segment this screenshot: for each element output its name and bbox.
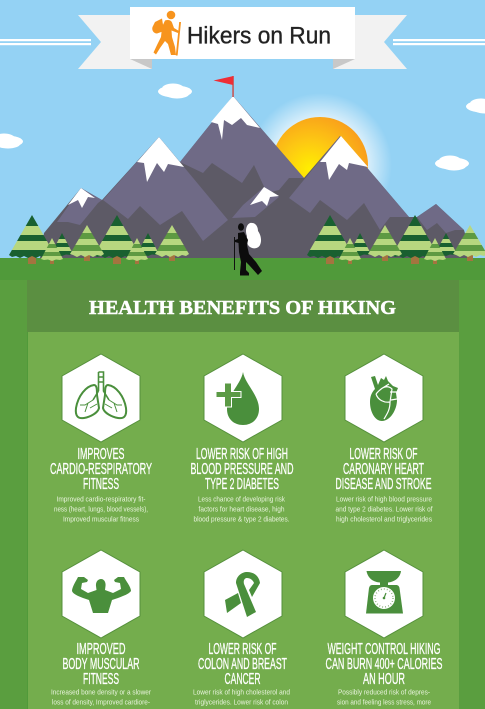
sun [248, 93, 392, 237]
benefit: colon and breast cancer [193, 550, 290, 706]
title [62, 641, 140, 688]
dark mountain base [40, 96, 472, 258]
snow caps [68, 96, 368, 208]
hexagon badge [204, 550, 282, 638]
icon: heart [370, 376, 398, 421]
title: IMPROVED [76, 641, 126, 658]
panel background outer edge [0, 280, 27, 709]
description: Lower risk of high blood pressure [336, 494, 432, 504]
description [54, 494, 148, 524]
description: and type 2 diabetes. Lower risk of [336, 504, 432, 514]
title: LOWER RISK OF [208, 641, 276, 658]
icon: flexing torso [72, 577, 131, 613]
title [326, 641, 442, 688]
title: BLOOD PRESSURE AND [190, 461, 294, 478]
ribbon tail right [333, 15, 407, 69]
description: Improved muscular fitness [63, 514, 139, 524]
trees left [8, 215, 190, 264]
logo text: Hikers on Run [187, 22, 331, 50]
backpack [246, 223, 261, 248]
clouds [0, 84, 485, 170]
description: triglycerides. Lower risk of colon [195, 698, 288, 706]
description: ness (heart, lungs, blood vessels), [54, 504, 148, 514]
title: AN HOUR [363, 671, 405, 688]
benefit: cardio-respiratory fitness [50, 354, 152, 524]
panel body [28, 332, 459, 709]
description: Improved cardio-respiratory fit- [56, 494, 146, 504]
description: Less chance of developing risk [198, 494, 285, 504]
mountain: small center [232, 187, 279, 218]
walking pole [234, 237, 235, 270]
title: FITNESS [83, 476, 119, 493]
description: Possibly reduced risk of depres- [338, 688, 431, 696]
mountain: far left [57, 188, 102, 225]
benefit: blood pressure and diabetes [190, 354, 294, 524]
banner plate [130, 7, 355, 59]
sky [0, 0, 485, 260]
ground [0, 258, 485, 709]
description: Increased bone density or a slower [51, 688, 152, 696]
flag [214, 76, 234, 97]
title: CARONARY HEART [343, 461, 424, 478]
title: LOWER RISK OF HIGH [196, 446, 288, 463]
benefit: coronary heart disease [336, 354, 432, 524]
panel header band [27, 280, 459, 332]
hexagon badge [62, 354, 140, 442]
title [50, 446, 152, 493]
mountain: far right [417, 204, 464, 233]
description: Lower risk of high cholesterol and [193, 688, 290, 696]
description [194, 494, 290, 524]
title: CANCER [224, 671, 260, 688]
mountain: right [289, 136, 409, 230]
hexagon badge [204, 354, 282, 442]
title: CARDIO-RESPIRATORY [50, 461, 152, 478]
description [51, 688, 152, 706]
mountain: center [180, 96, 304, 193]
benefit: weight control [326, 550, 442, 706]
description: sion and feeling less stress, more [337, 698, 431, 706]
icon: lungs [76, 372, 126, 418]
benefit: body muscular fitness [51, 550, 152, 706]
icon: awareness ribbon [225, 572, 260, 617]
icon: drop and plus [216, 372, 259, 425]
title: COLON AND BREAST [198, 656, 287, 673]
title [190, 446, 294, 493]
description: factors for heart disease, high [198, 504, 285, 514]
hexagon badge [345, 354, 423, 442]
icon: orange hiker logo [152, 11, 181, 55]
description: blood pressure & type 2 diabetes. [194, 514, 290, 524]
title [336, 446, 432, 493]
ribbon fold right [333, 59, 355, 69]
title banner [78, 7, 407, 69]
title: IMPROVES [78, 446, 124, 463]
description: high cholesterol and triglycerides [336, 514, 432, 524]
mountain: mid left [103, 137, 228, 241]
heading: HEALTH BENEFITS OF HIKING [89, 298, 396, 319]
description [336, 494, 432, 524]
title: FITNESS [83, 671, 119, 688]
decorative double lines [0, 39, 485, 45]
ribbon tail left [78, 15, 152, 69]
title: BODY MUSCULAR [62, 656, 140, 673]
description [337, 688, 431, 706]
ribbon fold left [130, 59, 152, 69]
description [193, 688, 290, 706]
hiker silhouette [234, 223, 262, 276]
title [198, 641, 287, 688]
mountains [40, 96, 472, 258]
trees right [306, 215, 485, 264]
title: TYPE 2 DIABETES [205, 476, 279, 493]
description: loss of density, Improved cardiore- [52, 698, 151, 706]
hiker body [235, 223, 262, 276]
icon: kitchen scale [366, 571, 403, 614]
panel: health benefits [0, 280, 485, 709]
hexagon badge [345, 550, 423, 638]
hexagon badge [62, 550, 140, 638]
title: LOWER RISK OF [350, 446, 418, 463]
